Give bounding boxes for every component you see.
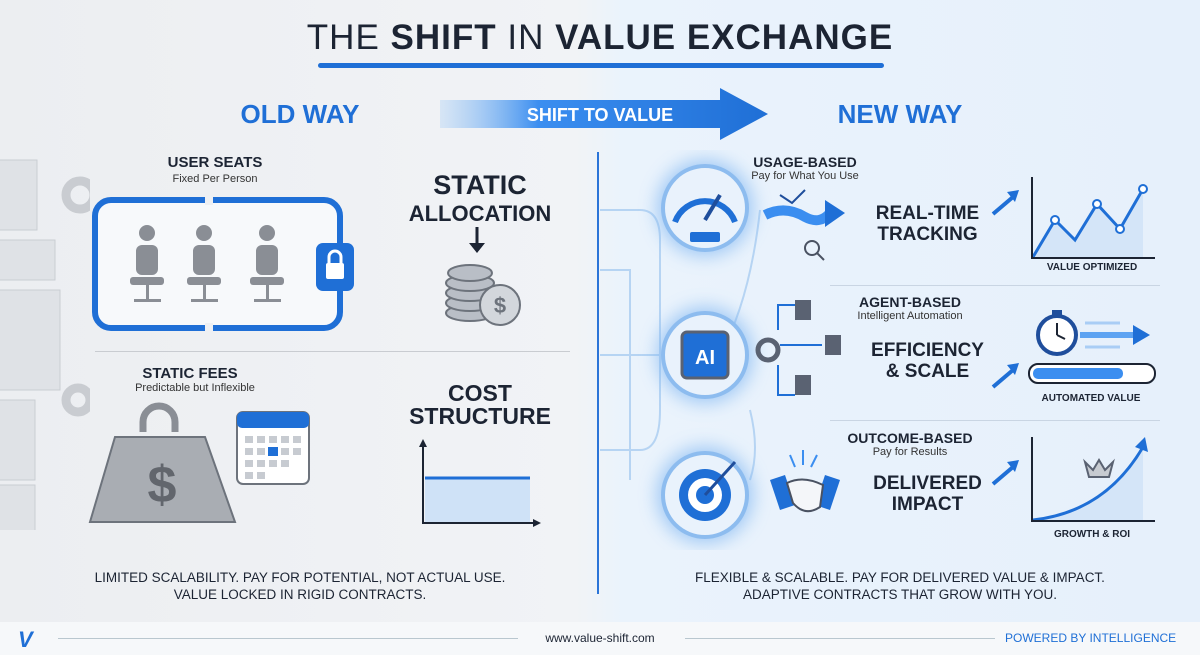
icon: stopwatch and progress: AUTOMATED VALUE — [1042, 393, 1141, 404]
heading: usage-based: USAGE-BASED — [753, 154, 857, 170]
arrow: shift to value — [440, 88, 768, 140]
text: old way summary — [95, 570, 505, 602]
decorative left blocks — [0, 160, 90, 530]
heading: outcome-based: Pay for Results — [873, 446, 947, 458]
text: new way summary: FLEXIBLE & SCALABLE. PAY FOR DELIVERED VALUE & IMPACT. — [695, 570, 1105, 585]
text: delivered impact: IMPACT — [892, 494, 963, 515]
icon: handshake — [770, 450, 840, 512]
heading: outcome-based: OUTCOME-BASED — [847, 430, 973, 446]
heading: agent-based — [857, 294, 963, 322]
text: real-time tracking: TRACKING — [877, 224, 978, 245]
icon: arrow down + coins — [445, 227, 521, 326]
footer tagline: POWERED BY INTELLIGENCE — [1005, 631, 1176, 645]
text: static allocation: STATIC — [433, 170, 527, 200]
text: static allocation: ALLOCATION — [409, 201, 551, 226]
text: real-time tracking — [876, 203, 979, 245]
title: THE SHIFT IN VALUE EXCHANGE — [307, 18, 893, 57]
icon: usage wave arrow — [762, 189, 845, 261]
icon: stopwatch and progress — [992, 310, 1156, 404]
chart: growth & roi: GROWTH & ROI — [1054, 529, 1130, 540]
text: cost structure — [409, 380, 551, 429]
icon: logo: V — [18, 627, 33, 652]
heading: old way: OLD WAY — [241, 99, 359, 129]
text: cost structure: COST — [448, 380, 512, 406]
chart: flat cost — [419, 439, 541, 527]
text: efficiency & scale — [871, 340, 984, 382]
heading: user seats: USER SEATS — [168, 154, 262, 171]
subtitle: Predictable but Inflexible — [135, 382, 255, 394]
heading: agent-based: AGENT-BASED — [859, 294, 961, 310]
divider — [95, 351, 570, 352]
text: efficiency & scale: & SCALE — [886, 361, 969, 382]
icon: arrow down + coins: $ — [494, 293, 506, 318]
heading: agent-based: Intelligent Automation — [857, 310, 963, 322]
divider — [830, 285, 1160, 286]
footer — [0, 622, 1200, 655]
heading: outcome-based — [847, 430, 973, 458]
text: new way summary: ADAPTIVE CONTRACTS THAT GROW WITH YOU. — [743, 587, 1057, 602]
text: delivered impact: DELIVERED — [873, 473, 982, 494]
footer url: www.value-shift.com — [545, 631, 655, 645]
text: efficiency & scale: EFFICIENCY — [871, 340, 984, 361]
chart: value optimized: VALUE OPTIMIZED — [1047, 262, 1137, 273]
text: delivered impact — [873, 473, 982, 515]
text: static allocation — [409, 170, 551, 226]
panel: user seats — [92, 154, 354, 331]
subtitle: Fixed Per Person — [172, 173, 257, 185]
divider — [830, 420, 1160, 421]
chart: growth & roi — [992, 437, 1155, 540]
panel: static fees — [88, 365, 310, 523]
icon: weight and calendar: $ — [148, 456, 177, 514]
icon: seats box with lock — [92, 197, 354, 331]
divider vertical — [597, 152, 599, 594]
text: cost structure: STRUCTURE — [409, 403, 551, 429]
heading: new way: NEW WAY — [838, 99, 962, 129]
icon: weight and calendar — [88, 402, 310, 523]
icon: flow spine with circles: AI — [695, 347, 715, 369]
icon: flow spine with circles — [600, 150, 763, 550]
text: real-time tracking: REAL-TIME — [876, 203, 979, 224]
heading: static fees: STATIC FEES — [142, 365, 238, 382]
title underline — [318, 63, 884, 68]
text: new way summary — [695, 570, 1105, 602]
heading: usage-based — [751, 154, 859, 182]
heading: usage-based: Pay for What You Use — [751, 170, 859, 182]
text: old way summary: VALUE LOCKED IN RIGID CONTRACTS. — [174, 587, 426, 602]
icon: robots — [756, 300, 841, 396]
text: old way summary: LIMITED SCALABILITY. PAY FOR POTENTIAL, NOT ACTUAL USE. — [95, 570, 505, 585]
chart: value optimized — [992, 177, 1155, 273]
arrow: shift to value: SHIFT TO VALUE — [527, 105, 673, 125]
